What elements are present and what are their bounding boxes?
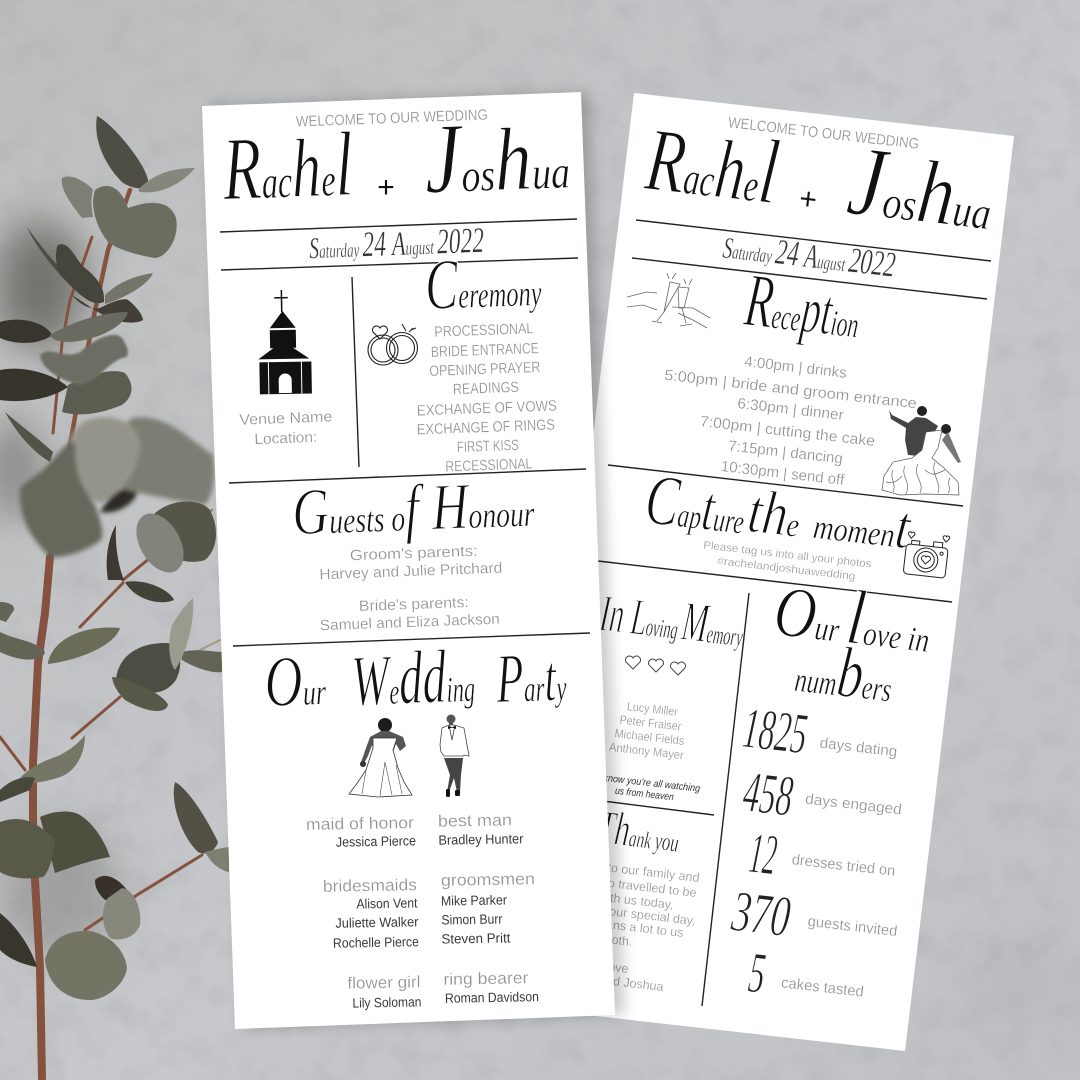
panel: ceremony and wedding party card (left) — [202, 92, 615, 1029]
heading: capture the moment: Capture — [642, 459, 750, 550]
guests of honour names: Harvey and Julie Pritchard — [319, 560, 503, 583]
round middle leaves — [107, 502, 216, 602]
heading: thank you: Thank you — [595, 801, 682, 863]
heading: our wedding party: Party — [494, 639, 568, 718]
ceremony order list: OPENING PRAYER — [429, 359, 541, 380]
guests of honour names: Groom's parents: — [350, 543, 478, 564]
title: couple names: Rachel — [220, 113, 355, 219]
heading: reception: Reception — [740, 258, 865, 354]
reception schedule: 5:00pm | bride and groom entrance — [663, 367, 918, 412]
wedding party: right column: Steven Pritt — [441, 930, 511, 947]
venue details: Venue Name — [239, 408, 333, 429]
icon: church — [257, 290, 312, 394]
stats list: days engaged — [804, 791, 903, 818]
venue details — [239, 408, 333, 448]
heading: our love in numbers: Our love in — [770, 565, 936, 669]
thank you message: Thank you to our family and — [545, 854, 700, 885]
stats list: guests invited — [807, 913, 898, 940]
wedding party: left column: Jessica Pierce — [336, 833, 416, 850]
wedding party: left column — [306, 814, 422, 1011]
thank you message: both. — [604, 932, 633, 949]
wedding party: left column: Lily Soloman — [352, 994, 422, 1011]
memorial names: Michael Fields — [614, 726, 685, 748]
heading: our wedding party: Wedding — [350, 634, 476, 722]
panel: reception and numbers card (right) — [525, 93, 1014, 1051]
wedding party: left column: flower girl — [347, 973, 421, 993]
branch stems — [0, 190, 220, 1080]
heading: in loving memory: In Loving Memory — [596, 581, 747, 659]
left card sheet — [202, 92, 615, 1029]
ceremony order list: FIRST KISS — [457, 437, 519, 456]
reception schedule: 6:30pm | dinner — [736, 395, 845, 424]
wedding party: left column: Alison Vent — [356, 895, 418, 912]
wedding party: right column — [438, 811, 539, 1006]
icon: wedding rings — [368, 324, 418, 365]
title: couple names — [220, 98, 571, 219]
ceremony order list: BRIDE ENTRANCE — [431, 340, 539, 361]
lower leaves — [0, 598, 229, 1000]
date: Saturday 24 August 2022 — [308, 220, 485, 266]
stats list — [728, 695, 903, 1006]
ceremony order list: PROCESSIONAL — [434, 320, 534, 341]
memorial names: Anthony Mayer — [608, 740, 685, 762]
reception schedule: 10:30pm | send off — [720, 458, 846, 489]
title: couple names: Joshua — [842, 124, 999, 251]
wedding party: right column: ring bearer — [443, 969, 529, 989]
wedding party: left column: maid of honor — [306, 814, 415, 834]
wedding party: left column: Juliette Walker — [335, 914, 419, 931]
stats list: 1825 — [740, 695, 811, 767]
stats list: cakes tasted — [780, 974, 865, 1001]
icon: bride — [349, 718, 412, 797]
thank you message: love — [605, 959, 629, 976]
left card shadow — [210, 92, 625, 1029]
stats list: 12 — [746, 820, 780, 887]
heading: guests of honour: Guests of Honour — [291, 468, 536, 549]
stats list: dresses tried on — [791, 851, 896, 880]
title: couple names — [640, 107, 999, 251]
thank you message: it means a lot to us — [578, 914, 684, 940]
divider lines — [220, 219, 590, 646]
eucalyptus branch — [0, 116, 229, 1080]
thank you message: on our special day, — [591, 902, 696, 928]
guests of honour names — [319, 543, 503, 634]
thank you message: with us today, — [597, 889, 674, 912]
wedding party: right column: best man — [438, 811, 512, 831]
memorial note: us from heaven — [614, 786, 675, 803]
divider lines — [595, 220, 991, 1006]
right card sheet — [525, 93, 1014, 1051]
memorial names — [608, 699, 685, 762]
icon: champagne toast — [627, 273, 710, 328]
wedding party: right column: Simon Burr — [441, 911, 503, 928]
memorial names: Peter Fraiser — [619, 713, 682, 733]
heading: capture the moment: moment — [811, 484, 915, 563]
thank you message: friends who travelled to be — [551, 870, 697, 900]
wedding party: right column: Roman Davidson — [445, 989, 539, 1006]
icon: three hearts — [625, 656, 686, 675]
ceremony order list: READINGS — [453, 379, 519, 398]
guests of honour names: Bride's parents: — [359, 594, 469, 615]
heading: capture the moment: the — [745, 477, 804, 551]
title: couple names: Rachel — [640, 107, 784, 223]
title: couple names: + — [797, 182, 819, 217]
photo tag instructions — [703, 539, 872, 583]
icon: groom — [440, 714, 469, 797]
heading: welcome: WELCOME TO OUR WEDDING — [296, 106, 488, 131]
date: Saturday 24 August 2022 — [721, 225, 898, 285]
ceremony order list: EXCHANGE OF VOWS — [417, 397, 557, 420]
dark upper leaves — [0, 116, 195, 462]
wedding party: left column: Rochelle Pierce — [333, 934, 419, 951]
title: couple names: Joshua — [422, 98, 571, 215]
memorial note: I know you're all watching — [598, 772, 701, 795]
ceremony order list: EXCHANGE OF RINGS — [417, 416, 555, 439]
wedding party: left column: bridesmaids — [323, 876, 417, 896]
reception schedule: 7:00pm | cutting the cake — [699, 413, 876, 450]
heading: our love in numbers: numbers — [792, 627, 897, 717]
memorial names: Lucy Miller — [626, 699, 679, 719]
stats list: 5 — [746, 939, 769, 1006]
thank you message: Rachel and Joshua — [556, 968, 664, 994]
icon: camera — [903, 531, 950, 578]
reception schedule: 4:00pm | drinks — [743, 353, 848, 382]
title: couple names: + — [377, 171, 395, 204]
heading: capture the moment — [642, 459, 915, 563]
icon: dancing couple — [882, 406, 961, 495]
thank you message — [545, 854, 700, 994]
ceremony order list: RECESSIONAL — [445, 455, 533, 476]
photo tag instructions: Please tag us into all your photos — [703, 539, 872, 571]
heading: ceremony: Ceremony — [424, 241, 543, 325]
venue details: Location: — [254, 429, 318, 448]
blurred foreground leaves — [20, 417, 214, 557]
photo tag instructions: #rachelandjoshuawedding — [717, 555, 856, 583]
stats list: 458 — [740, 759, 796, 829]
reception schedule: 7:15pm | dancing — [727, 438, 844, 467]
reception schedule — [663, 353, 918, 489]
heading: welcome: WELCOME TO OUR WEDDING — [727, 114, 920, 153]
wedding party: right column: groomsmen — [441, 870, 535, 890]
wedding party: right column: Mike Parker — [441, 892, 508, 909]
heading: our wedding party — [263, 634, 568, 722]
guests of honour names: Samuel and Eliza Jackson — [320, 611, 500, 634]
ceremony order list — [417, 320, 557, 476]
stats list: days dating — [819, 735, 898, 760]
heading: our love in numbers — [770, 565, 936, 717]
wedding party: right column: Bradley Hunter — [438, 831, 524, 848]
heading: our wedding party: Our — [263, 640, 328, 722]
stats list: 370 — [728, 878, 794, 949]
